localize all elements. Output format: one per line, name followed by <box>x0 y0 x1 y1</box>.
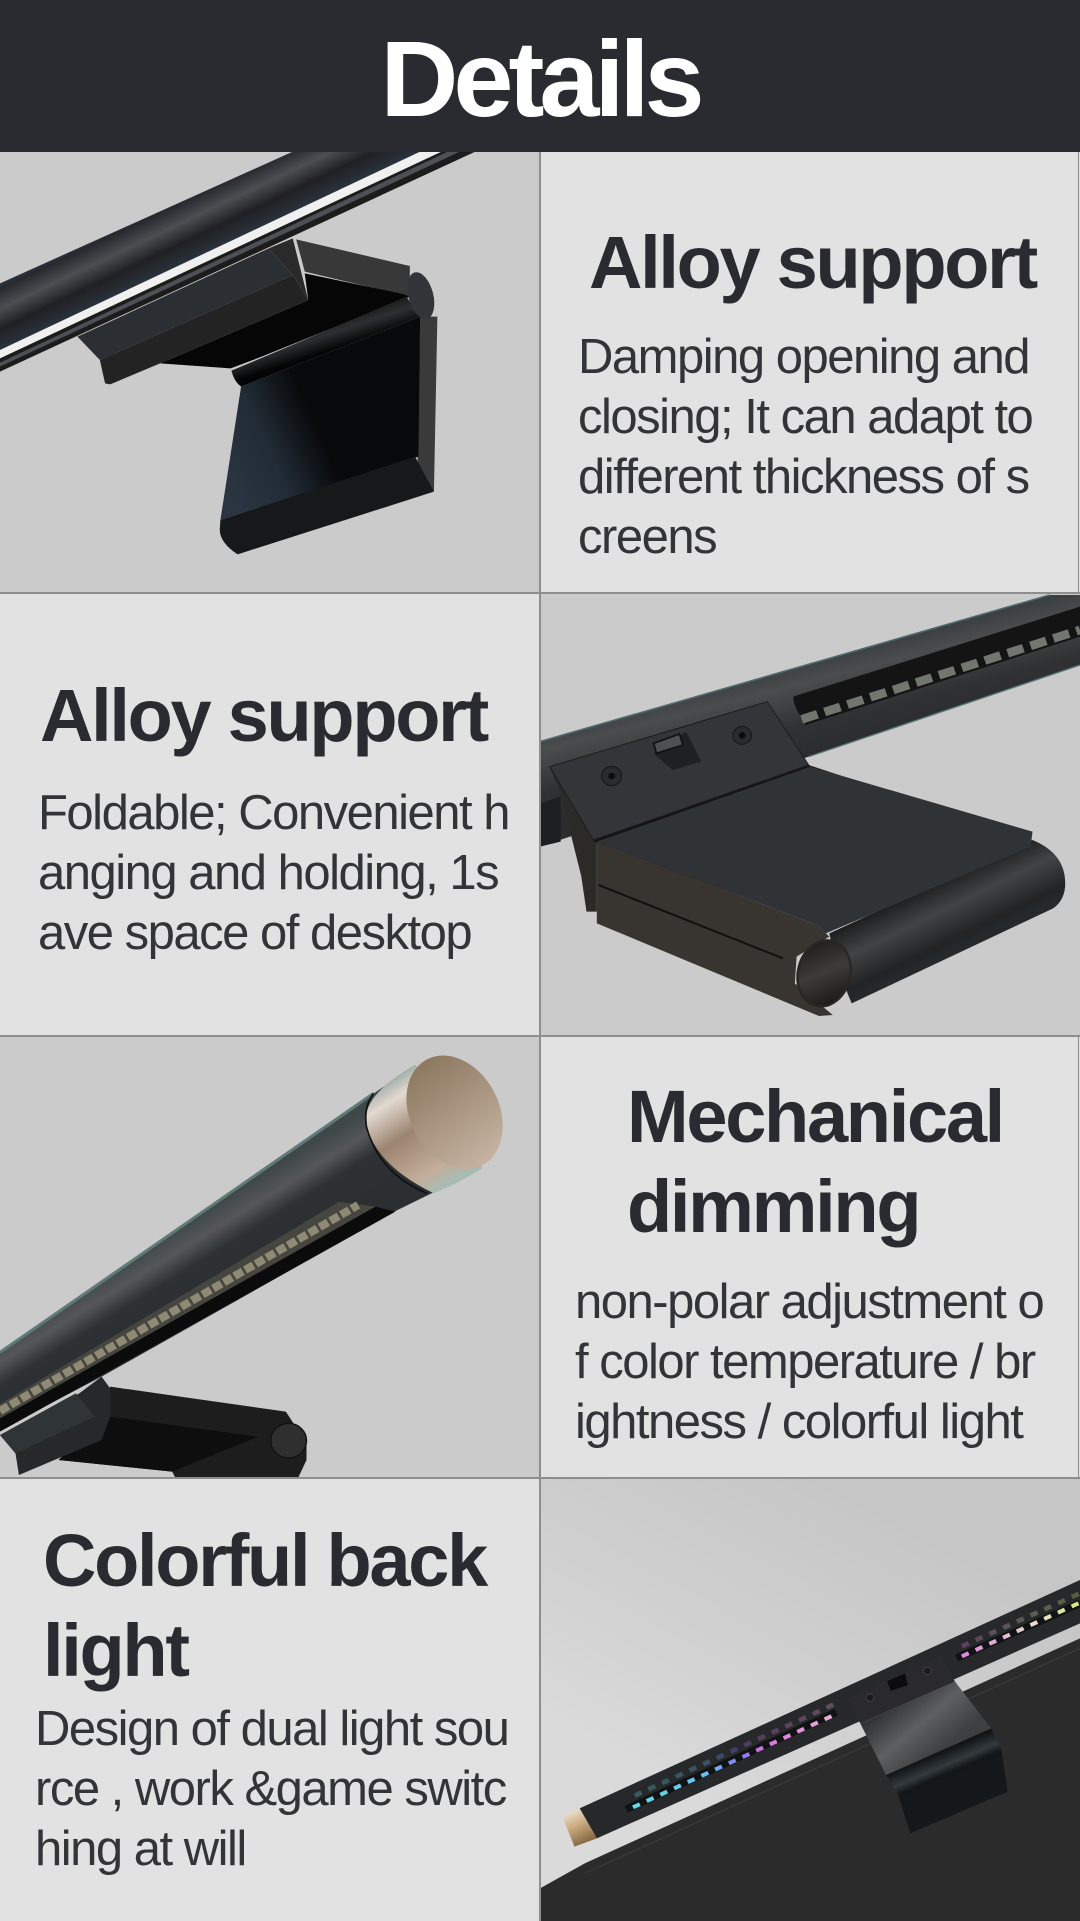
body text: ightness / colorful light <box>575 1395 1022 1449</box>
heading: dimming <box>627 1165 919 1248</box>
body text: non-polar adjustment o <box>575 1275 1043 1329</box>
body text: ave space of desktop <box>38 906 471 960</box>
body text <box>578 330 1032 564</box>
lamp bar with colored LEDs <box>562 1580 1080 1847</box>
right edge line, top text panel <box>1078 152 1079 593</box>
lamp bar with LED slot <box>540 595 1080 847</box>
body text <box>575 1275 1043 1449</box>
heading: Alloy support <box>40 674 487 757</box>
panel: mechanical dimming text <box>540 1036 1080 1478</box>
lamp bar <box>0 152 475 372</box>
heading <box>43 1519 488 1692</box>
row divider three <box>0 1477 1080 1479</box>
body text: anging and holding, 1s <box>38 846 498 900</box>
heading: light <box>43 1609 188 1692</box>
row divider one <box>0 592 1080 594</box>
panel: alloy support text <box>540 152 1080 593</box>
body text: creens <box>578 510 716 564</box>
folded clamp <box>550 702 1065 1016</box>
body text: closing; It can adapt to <box>578 390 1032 444</box>
header bar <box>0 0 1080 152</box>
heading: Mechanical <box>627 1075 1003 1158</box>
body text <box>35 1702 508 1876</box>
body text: Foldable; Convenient h <box>38 786 509 840</box>
vertical divider <box>539 152 541 1921</box>
body text: hing at will <box>35 1822 246 1876</box>
body text: different thickness of s <box>578 450 1029 504</box>
screws and USB port <box>602 726 751 786</box>
panel: foldable support product image <box>540 593 1080 1036</box>
lamp bar <box>0 1065 482 1432</box>
bracket <box>0 1377 307 1478</box>
monitor bezel line <box>585 1648 1080 1873</box>
panel: alloy support product image <box>0 152 540 593</box>
panel: mechanical dimming product image <box>0 1036 540 1478</box>
bracket <box>77 238 439 554</box>
row divider two <box>0 1035 1080 1037</box>
clip <box>848 1655 1008 1833</box>
body text: rce , work &game switc <box>35 1762 506 1816</box>
heading <box>627 1075 1003 1248</box>
heading: Alloy support <box>589 221 1036 304</box>
heading: Colorful back <box>43 1519 486 1602</box>
right edge line, third text panel <box>1078 1036 1079 1478</box>
body text: f color temperature / br <box>575 1335 1035 1389</box>
gold end cap <box>366 1040 521 1193</box>
panel: colorful back light text <box>0 1478 540 1921</box>
body text: Design of dual light sou <box>35 1702 508 1756</box>
body text: Damping opening and <box>578 330 1029 384</box>
panel: foldable support text <box>0 593 540 1036</box>
panel: colorful back light product image <box>540 1478 1080 1921</box>
monitor <box>540 1638 1080 1921</box>
body text <box>38 786 509 960</box>
backdrop <box>540 1475 1080 1921</box>
title: Details <box>380 18 700 139</box>
